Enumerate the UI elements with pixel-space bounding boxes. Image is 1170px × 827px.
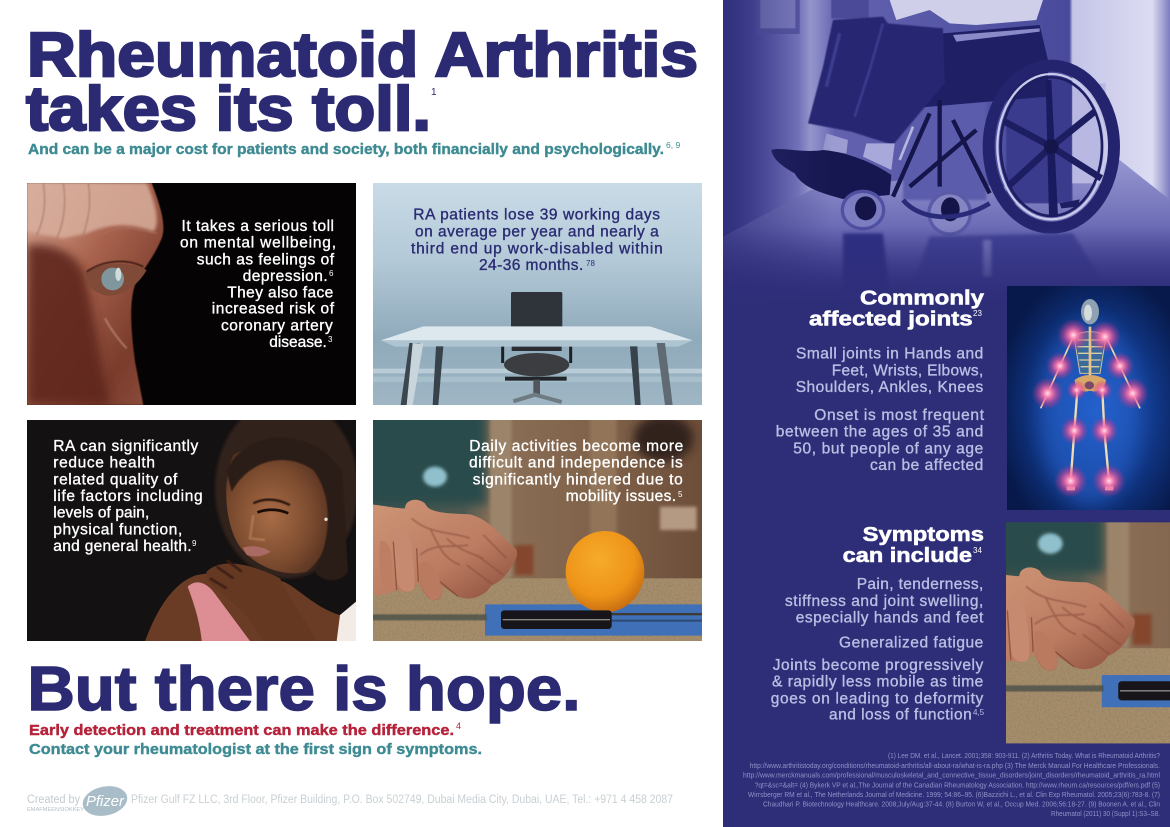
photo: close-up of eye — [27, 183, 164, 405]
text: symptoms detail: stiffness and joint swelling, — [785, 593, 983, 610]
panel text: life factors including — [53, 488, 203, 505]
panel text: and general health. — [53, 538, 192, 555]
title — [26, 21, 698, 144]
panel text — [180, 218, 336, 351]
footer: created by and address: EMAFMEENSIOKKEY — [27, 807, 84, 813]
text: affected joints detail: Onset is most frequent — [814, 407, 985, 424]
text: symptoms detail: goes on leading to deformity — [771, 690, 984, 707]
photo: empty desk and chair — [373, 183, 702, 405]
panel text — [411, 207, 663, 274]
panel text: 78 — [586, 259, 595, 268]
panel text: RA patients lose 39 working days — [413, 207, 660, 224]
panel text — [469, 438, 683, 505]
panel text: 24-36 months. — [479, 257, 583, 274]
call to action text: Contact your rheumatologist at the first sign of symptoms. — [29, 742, 482, 758]
heading: symptoms can include: Symptoms — [863, 523, 984, 546]
footer: created by and address: Created by — [27, 794, 80, 806]
title: Rheumatoid Arthritis — [27, 21, 698, 90]
panel text: disease. — [269, 334, 327, 351]
photo: arthritic hand close-up — [1006, 522, 1170, 744]
heading: symptoms can include: 34 — [973, 546, 982, 555]
panel: mental wellbeing — [27, 183, 356, 405]
panel text: such as feelings of — [197, 251, 335, 268]
subtitle: And can be a major cost for patients and society, both financially and psychologically. — [28, 142, 664, 158]
panel text: reduce health — [53, 455, 155, 472]
text: symptoms detail: & rapidly less mobile as time — [772, 674, 983, 691]
title: takes its toll. — [26, 75, 431, 144]
panel text: difficult and independence is — [469, 455, 683, 472]
panel text: on average per year and nearly a — [415, 224, 659, 241]
text: affected joints detail: 50, but people of any age — [793, 440, 983, 457]
panel text: significantly hindered due to — [473, 471, 683, 488]
photo: arthritic hand beside orange and knife — [373, 420, 702, 641]
panel text: Daily activities become more — [469, 438, 683, 455]
panel text: 9 — [192, 539, 197, 548]
text: symptoms detail: Joints become progressively — [773, 657, 984, 674]
panel text: related quality of — [53, 471, 178, 488]
text: symptoms detail: 4,5 — [973, 708, 985, 717]
subtitle: 6, 9 — [666, 140, 680, 150]
title: 1 — [431, 87, 437, 98]
text: affected joints detail: can be affected — [870, 457, 983, 474]
text: affected joints detail: Feet, Wrists, Elbows, — [832, 363, 983, 380]
call to action text — [29, 721, 482, 758]
heading: commonly affected joints: 23 — [973, 309, 982, 318]
references — [743, 751, 1160, 818]
heading: commonly affected joints: affected joints — [809, 308, 973, 331]
panel text: levels of pain, — [53, 505, 149, 522]
panel text: coronary artery — [221, 317, 333, 334]
icon: Pfizer logo: Pfizer — [86, 793, 125, 810]
photo: skeleton with glowing joints — [1007, 286, 1170, 510]
panel text: They also face — [227, 285, 333, 302]
text: affected joints detail — [776, 346, 985, 474]
heading: symptoms can include — [843, 523, 984, 567]
panel text: 6 — [329, 269, 334, 278]
panel: right column — [723, 0, 1170, 827]
call to action text: Early detection and treatment can make the difference. — [29, 723, 454, 739]
heading: but there is hope: But there is hope. — [28, 655, 580, 724]
panel text: physical function, — [53, 521, 182, 538]
panel text: depression. — [243, 268, 328, 285]
panel text: increased risk of — [212, 301, 335, 318]
footer: created by and address: Pfizer Gulf FZ LLC, 3rd Floor, Pfizer Building, P.O. Box 502749, Dubai Media City, Dubai, UAE, Tel.: +971 4 458 2087 — [131, 794, 673, 806]
heading: symptoms can include: can include — [843, 544, 972, 567]
text: symptoms detail: Pain, tenderness, — [857, 576, 983, 593]
footer: created by and address — [27, 782, 673, 820]
panel: lost working days — [373, 183, 702, 405]
panel text: third end up work-disabled within — [411, 240, 663, 257]
panel: daily activities — [373, 420, 702, 641]
text: symptoms detail: especially hands and feet — [796, 610, 984, 627]
panel text: RA can significantly — [53, 438, 199, 455]
text: affected joints detail: Shoulders, Ankles, Knees — [796, 379, 984, 396]
heading: commonly affected joints — [809, 286, 985, 331]
panel text: It takes a serious toll — [182, 218, 334, 235]
text: symptoms detail: and loss of function — [829, 706, 972, 723]
panel text — [53, 438, 203, 555]
panel: quality of life — [27, 398, 358, 641]
icon: Pfizer logo — [80, 782, 130, 820]
photo: person in wheelchair — [723, 0, 1170, 300]
panel text: mobility issues. — [566, 488, 676, 505]
photo: woman holding her shoulder — [145, 420, 356, 641]
text: symptoms detail — [771, 576, 985, 723]
text: affected joints detail: Small joints in Hands and — [796, 346, 983, 363]
panel text: 3 — [328, 335, 333, 344]
call to action text: 4 — [456, 721, 461, 731]
text: symptoms detail: Generalized fatigue — [839, 635, 983, 652]
panel text: on mental wellbeing, — [180, 235, 336, 252]
heading: commonly affected joints: Commonly — [860, 286, 985, 309]
panel text: 5 — [678, 490, 683, 499]
text: affected joints detail: between the ages of 35 and — [776, 424, 983, 441]
